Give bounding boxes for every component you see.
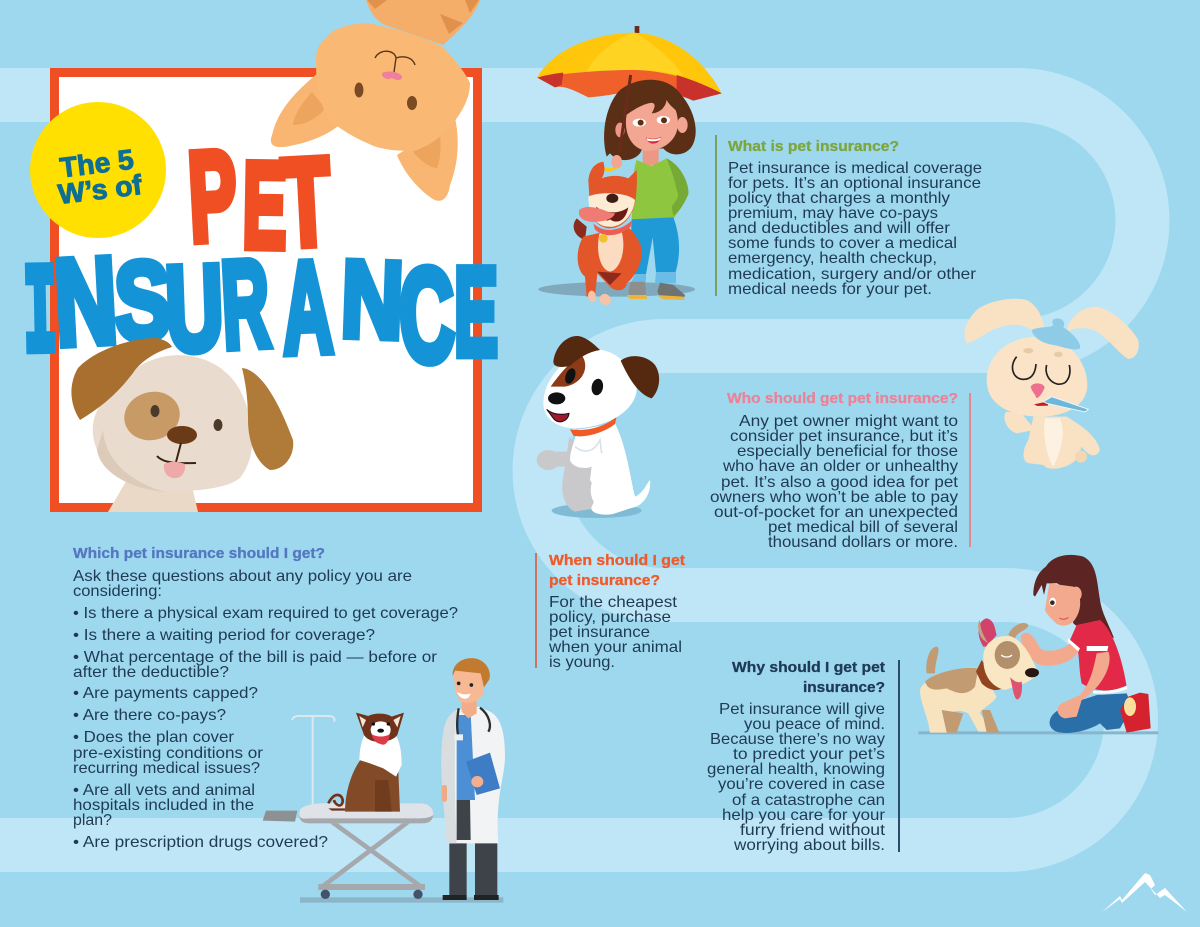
badge: The 5 W's of (30, 102, 166, 238)
block: why should I get pet insurance: Because there’s no way (710, 731, 885, 748)
block: which pet insurance should I get: • Is there a waiting period for coverage? (73, 627, 375, 644)
block: when should I get pet insurance: When should I get (549, 553, 685, 569)
heading: INSURANCE: A (280, 235, 335, 382)
block: why should I get pet insurance: Why should I get pet (732, 660, 885, 676)
block: when should I get pet insurance: policy, purchase (549, 609, 671, 626)
heading: INSURANCE: I (22, 246, 58, 389)
block: what is pet insurance: policy that charges a monthly (728, 190, 950, 207)
logo: mountain peaks (1102, 873, 1187, 912)
illustration: vet with dog on exam table (263, 658, 505, 903)
block: why should I get pet insurance: you peace of mind. (744, 716, 885, 733)
block: which pet insurance should I get: Ask these questions about any policy you are (73, 568, 412, 585)
block: when should I get pet insurance: pet insurance? (549, 573, 660, 589)
block: which pet insurance should I get: • Are payments capped? (73, 685, 258, 702)
icon: veterinarian (441, 658, 505, 900)
block: why should I get pet insurance: general health, knowing (707, 761, 885, 778)
heading: PET (185, 124, 334, 274)
block: why should I get pet insurance: insurance? (803, 680, 885, 696)
block: which pet insurance should I get: • Is there a physical exam required to get coverage? (73, 605, 458, 622)
block: what is pet insurance: Pet insurance is medical coverage (728, 160, 982, 177)
block: which pet insurance should I get: considering: (73, 583, 162, 600)
block: which pet insurance should I get (73, 546, 458, 851)
block: what is pet insurance: premium, may have co-pays (728, 205, 938, 222)
block: which pet insurance should I get: plan? (73, 812, 112, 829)
block: which pet insurance should I get: recurring medical issues? (73, 760, 260, 777)
block: which pet insurance should I get: • What percentage of the bill is paid — before or (73, 649, 438, 666)
icon: cat peeking from the top (271, 0, 480, 201)
block: why should I get pet insurance (707, 660, 900, 854)
block: what is pet insurance (715, 135, 982, 298)
block: when should I get pet insurance: pet insurance (549, 624, 650, 641)
block: why should I get pet insurance: worrying about bills. (733, 837, 885, 854)
block: which pet insurance should I get: • Are prescription drugs covered? (73, 834, 328, 851)
block: who should get pet insurance: who have an older or unhealthy (722, 458, 958, 475)
block: which pet insurance should I get: • Does the plan cover (73, 729, 235, 746)
block: who should get pet insurance: pet. It’s also a good idea for pet (721, 474, 959, 491)
block: what is pet insurance: What is pet insurance? (728, 139, 899, 155)
block: why should I get pet insurance: help you care for your (722, 807, 886, 824)
heading: INSURANCE: R (218, 235, 273, 375)
block: what is pet insurance: medical needs for your pet. (728, 281, 932, 298)
heading: PET: E (242, 136, 288, 274)
block: which pet insurance should I get: pre-existing conditions or (73, 745, 264, 762)
heading: INSURANCE: N (339, 237, 406, 361)
heading: INSURANCE: C (397, 240, 457, 390)
block: who should get pet insurance (710, 391, 971, 551)
block: who should get pet insurance: especially beneficial for those (737, 443, 958, 460)
block: why should I get pet insurance: you’re covered in case (718, 776, 885, 793)
illustration: girl with umbrella and dog (537, 26, 722, 305)
block: which pet insurance should I get: • Are all vets and animal (73, 782, 255, 799)
block: what is pet insurance: for pets. It’s an optional insurance (728, 175, 981, 192)
icon: IV stand (292, 716, 334, 805)
block: who should get pet insurance: out-of-pocket for an unexpected (714, 504, 958, 521)
block: which pet insurance should I get: Which pet insurance should I get? (73, 546, 325, 562)
block: who should get pet insurance: Who should get pet insurance? (727, 391, 958, 407)
block: why should I get pet insurance: Pet insurance will give (719, 701, 885, 718)
icon: husky on table (328, 713, 404, 812)
title panel (22, 0, 498, 512)
block: why should I get pet insurance: of a catastrophe can (732, 792, 885, 809)
block: who should get pet insurance: thousand dollars or more. (768, 534, 958, 551)
block: when should I get pet insurance: For the cheapest (549, 594, 678, 611)
icon: puppy peeking from the bottom (71, 338, 293, 512)
heading: PET: T (279, 131, 334, 272)
illustration: white dog begging (537, 336, 659, 518)
heading: PET: P (185, 124, 240, 268)
block: who should get pet insurance: Any pet owner might want to (739, 413, 958, 430)
heading: INSURANCE: S (112, 238, 173, 364)
block: why should I get pet insurance: to predict your pet’s (733, 746, 885, 763)
badge: The 5 W's of: The 5 (58, 144, 135, 183)
block: which pet insurance should I get: after the deductible? (73, 664, 229, 681)
badge: The 5 W's of: W’s of (56, 169, 144, 210)
block: what is pet insurance: medication, surgery and/or other (728, 266, 977, 283)
heading: INSURANCE: U (163, 239, 226, 377)
heading: INSURANCE: N (51, 232, 120, 372)
block: what is pet insurance: and deductibles and will offer (728, 220, 951, 237)
block: why should I get pet insurance: furry friend without (740, 822, 886, 839)
block: who should get pet insurance: owners who won’t be able to pay (710, 489, 958, 506)
block: which pet insurance should I get: hospitals included in the (73, 797, 254, 814)
block: what is pet insurance: some funds to cover a medical (728, 235, 957, 252)
block: which pet insurance should I get: • Are there co-pays? (73, 707, 226, 724)
illustration: girl petting puppy (918, 555, 1158, 734)
block: what is pet insurance: emergency, health checkup, (728, 250, 937, 267)
illustration: sick bunny (964, 299, 1139, 469)
heading: INSURANCE: E (454, 244, 498, 383)
icon: exam table (263, 803, 433, 899)
block: when should I get pet insurance: when your animal (548, 639, 682, 656)
heading: INSURANCE (22, 232, 498, 390)
block: when should I get pet insurance (535, 553, 685, 671)
block: when should I get pet insurance: is young. (549, 654, 615, 671)
block: who should get pet insurance: pet medical bill of several (768, 519, 958, 536)
block: who should get pet insurance: consider pet insurance, but it’s (730, 428, 958, 445)
